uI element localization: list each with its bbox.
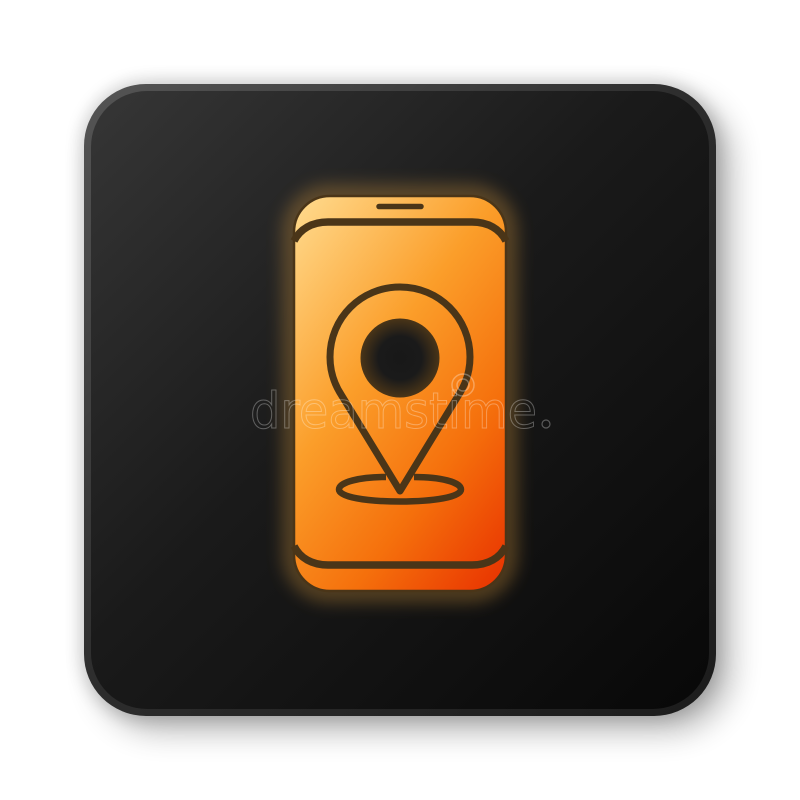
pin base ellipse	[339, 477, 461, 502]
button drop shadow	[80, 80, 730, 730]
phone body	[294, 196, 506, 591]
watermark: dreamstime	[250, 382, 537, 440]
icon: smartphone with map pin	[294, 196, 506, 591]
map pin outline	[330, 287, 470, 491]
phone glow	[294, 196, 506, 591]
phone screen outline	[294, 222, 506, 565]
black square button	[84, 84, 716, 716]
speaker slot	[379, 204, 421, 209]
map pin centre dot	[360, 318, 440, 398]
